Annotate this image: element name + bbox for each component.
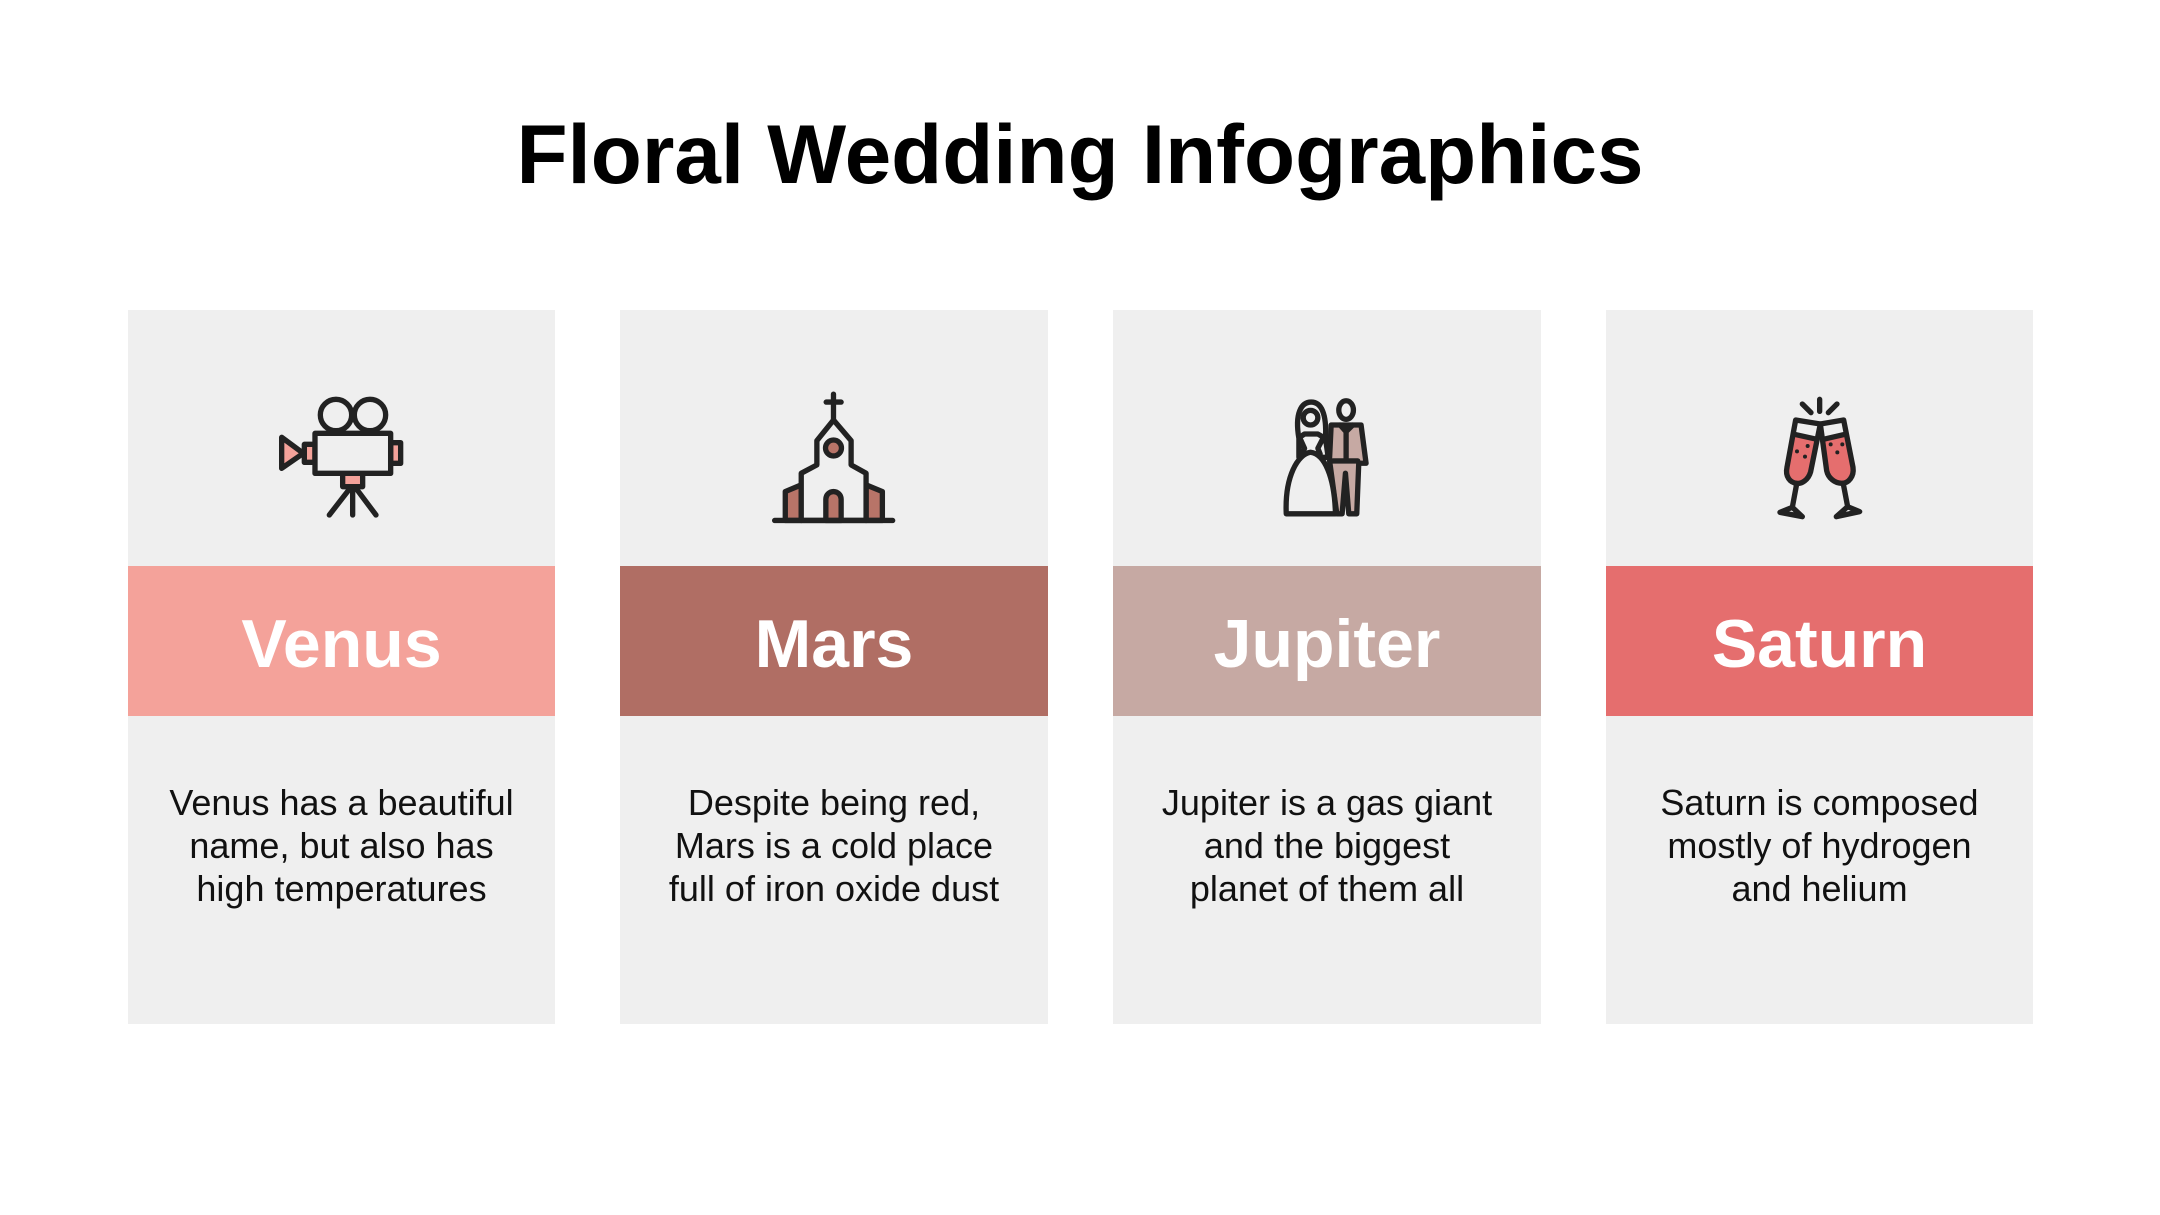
heading band: Venus	[128, 566, 555, 716]
text: Venus description: name, but also has	[189, 825, 494, 866]
text: Jupiter description: planet of them all	[1190, 868, 1464, 909]
text: Jupiter description	[1162, 782, 1492, 909]
champagne bubbles	[1795, 442, 1844, 459]
text: Venus description	[169, 782, 514, 909]
text: Saturn description: Saturn is composed	[1660, 782, 1979, 823]
text: Mars description: Despite being red,	[688, 782, 980, 823]
icon: film camera	[279, 396, 404, 518]
text: Saturn description	[1660, 782, 1979, 909]
text: Venus description: Venus has a beautiful	[169, 782, 514, 823]
text: Jupiter description: and the biggest	[1204, 825, 1450, 866]
heading band: Venus: Venus	[241, 606, 442, 682]
icon: bride and groom	[1283, 398, 1369, 516]
text: Mars description: Mars is a cold place	[675, 825, 993, 866]
text: Jupiter description: Jupiter is a gas giant	[1162, 782, 1492, 823]
heading band: Saturn: Saturn	[1712, 606, 1927, 682]
panel: Venus	[128, 310, 555, 1024]
text: Mars description: full of iron oxide dust	[669, 868, 999, 909]
panel: Jupiter	[1113, 310, 1541, 1024]
heading band: Jupiter	[1113, 566, 1541, 716]
panel: Saturn	[1606, 310, 2033, 1024]
icon: champagne toast	[1777, 396, 1862, 520]
text: Saturn description: mostly of hydrogen	[1667, 825, 1972, 866]
text: Saturn description: and helium	[1731, 868, 1908, 909]
text: Mars description	[669, 782, 999, 909]
heading band: Jupiter: Jupiter	[1214, 606, 1440, 682]
title: Floral Wedding Infographics	[516, 107, 1644, 201]
text: Venus description: high temperatures	[196, 868, 487, 909]
heading band: Mars	[620, 566, 1048, 716]
heading band: Saturn	[1606, 566, 2033, 716]
heading band: Mars: Mars	[755, 606, 913, 682]
icon: church	[772, 392, 896, 524]
panel: Mars	[620, 310, 1048, 1024]
